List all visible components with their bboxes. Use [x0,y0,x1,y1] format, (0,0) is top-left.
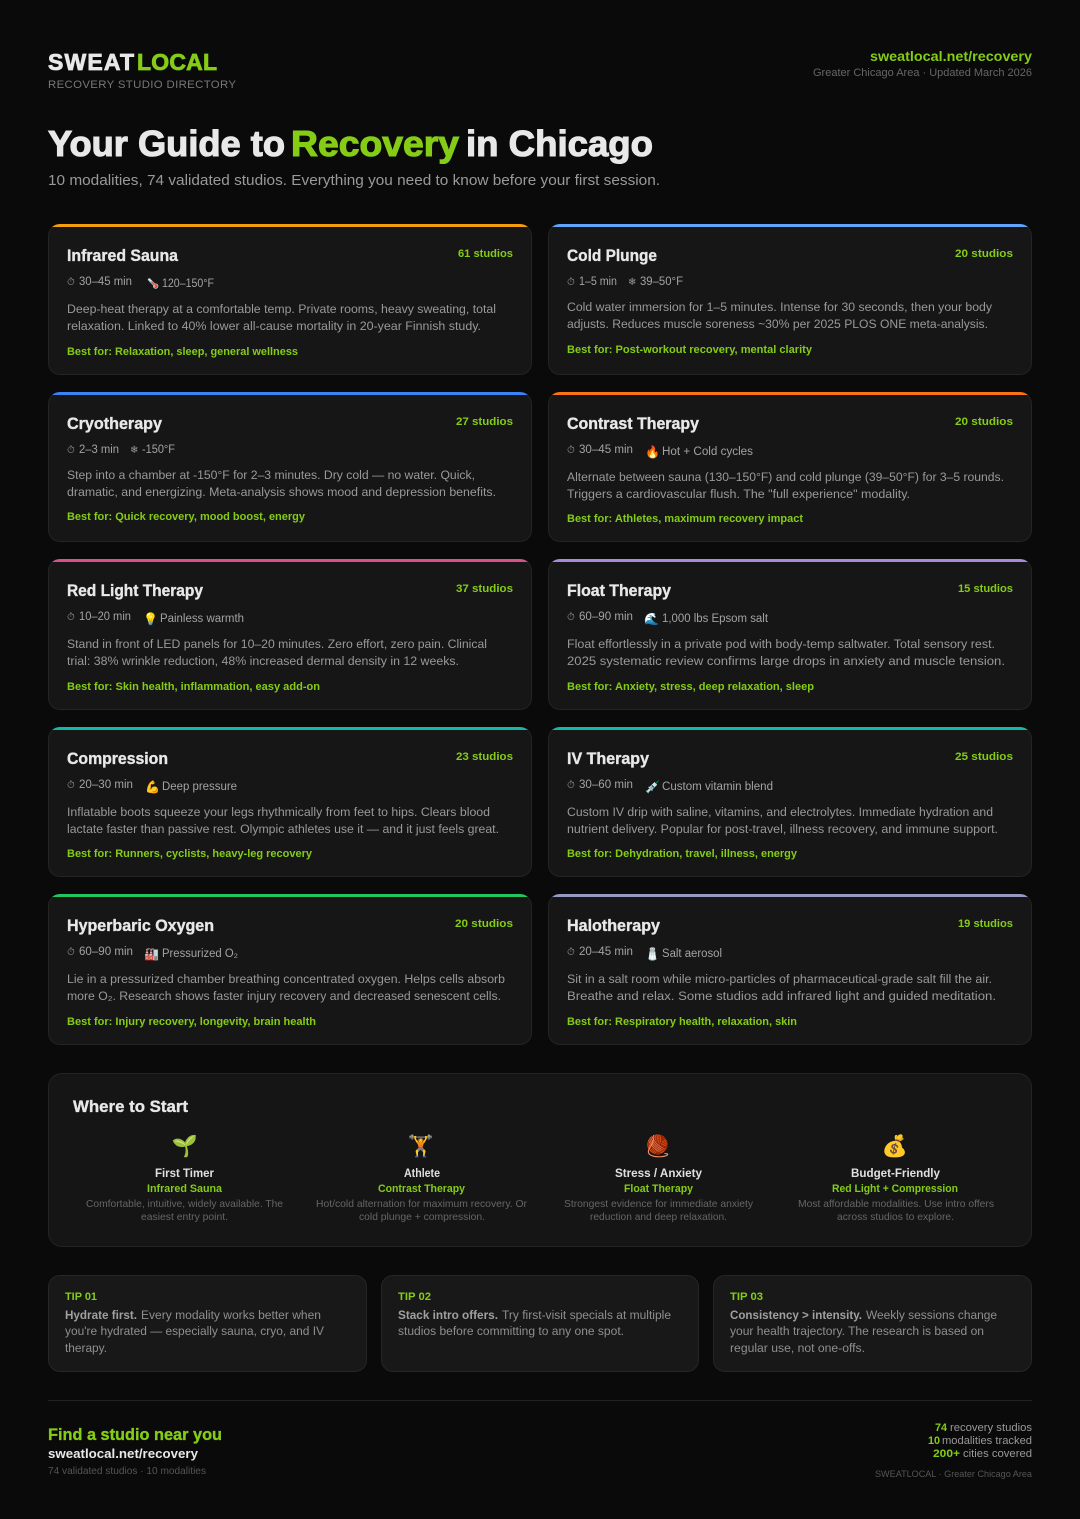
description [567,300,993,331]
card title: Halotherapy [567,917,660,935]
session meta: 💪 [145,780,160,794]
description [67,302,496,333]
studio count: 20 studios [455,918,513,930]
best for: Best for: Anxiety, stress, deep relaxation, sleep [567,681,814,693]
column: Athlete: Contrast Therapy [378,1183,466,1195]
footer: call to action: Find a studio near you [48,1425,222,1444]
header: brand logo: SWEAT [48,49,134,75]
session meta: 39–50°F [640,276,683,288]
best for: Best for: Respiratory health, relaxation, skin [567,1016,797,1028]
header: brand logo: LOCAL [137,49,217,75]
session meta [567,946,722,961]
tip card 02: TIP 02 [398,1291,431,1303]
column: Budget-Friendly [798,1133,994,1223]
footer: call to action [48,1425,222,1477]
description [67,972,505,1003]
column: First Timer: 🌱 [172,1134,198,1159]
session meta: Pressurized O₂ [162,948,238,960]
description: Triggers a cardiovascular flush. The "full experience" modality. [567,487,910,501]
session meta: 🌡️ [143,273,163,294]
session meta: Custom vitamin blend [662,781,773,793]
column: Athlete: Hot/cold alternation for maximum recovery. Or [316,1199,528,1210]
best for: Best for: Quick recovery, mood boost, energy [67,511,306,523]
session meta: 1–5 min [579,276,617,288]
studio count: 27 studios [456,416,513,428]
description [567,470,1004,501]
footer: stats: recovery studios [950,1422,1032,1434]
description: Inflatable boots squeeze your legs rhythmically from feet to hips. Clears blood [67,805,490,819]
session meta: Salt aerosol [662,948,722,960]
description: relaxation. Linked to 40% lower all-cause mortality in 20-year Finnish study. [67,319,481,333]
description: 2025 systematic review confirms large drops in anxiety and muscle tension. [567,654,1005,668]
column: Athlete: Athlete [404,1166,440,1180]
column: Athlete [316,1133,528,1223]
footer: call to action: 74 validated studios · 10 modalities [48,1466,206,1477]
session meta [567,444,753,459]
tip card 03: regular use, not one-offs. [730,1341,865,1355]
card title: Hyperbaric Oxygen [67,917,214,935]
description: Cold water immersion for 1–5 minutes. Intense for 30 seconds, then your body [567,300,993,314]
footer: stats [875,1422,1033,1479]
tip card 02: Stack intro offers. [398,1308,498,1322]
session meta: ⏱ [67,947,75,958]
panel: Float Therapy [548,559,1032,710]
column: Budget-Friendly: across studios to explore. [837,1212,954,1223]
session meta: 2–3 min [79,444,119,456]
session meta: ⏱ [567,612,575,623]
session meta: 💉 [645,780,660,794]
session meta: ⏱ [67,780,75,791]
tip card 03: Consistency > intensity. [730,1308,862,1322]
panel: Halotherapy [548,894,1032,1044]
card title: Infrared Sauna [67,247,179,265]
tip card 03 [714,1276,1032,1372]
tip card 03: your health trajectory. The research is based on [730,1324,984,1338]
session meta [67,444,175,456]
subtitle: 10 modalities, 74 validated studios. Everything you need to know before your first session. [48,173,660,189]
best for: Best for: Runners, cyclists, heavy-leg recovery [67,848,313,860]
description: Float effortlessly in a private pod with body-temp saltwater. Total sensory rest. [567,637,995,651]
session meta: 20–45 min [579,946,633,958]
session meta: 20–30 min [79,779,133,791]
header: brand logo: RECOVERY STUDIO DIRECTORY [48,79,236,91]
description: Stand in front of LED panels for 10–20 minutes. Zero effort, zero pain. Clinical [67,637,487,651]
title: in Chicago [466,123,653,164]
studio count: 20 studios [955,416,1013,428]
column: Stress / Anxiety: reduction and deep relaxation. [590,1212,727,1223]
best for: Best for: Injury recovery, longevity, brain health [67,1016,316,1028]
card title: IV Therapy [567,750,649,768]
best for: Best for: Dehydration, travel, illness, energy [567,848,798,860]
description [67,637,487,668]
card title: Red Light Therapy [67,582,203,600]
description: Step into a chamber at -150°F for 2–3 minutes. Dry cold — no water. Quick, [67,468,475,482]
studio count: 25 studios [955,751,1013,763]
session meta: 🔥 [645,445,660,459]
column: Stress / Anxiety: 🧶 [645,1133,671,1159]
session meta: ❄ [628,277,636,288]
session meta: ⏱ [567,947,575,958]
footer: call to action: sweatlocal.net/recovery [48,1446,199,1461]
description [67,468,496,499]
best for: Best for: Athletes, maximum recovery impact [567,513,803,525]
card title: Cryotherapy [67,415,162,433]
panel: Hyperbaric Oxygen [48,894,532,1044]
session meta: ⏱ [567,780,575,791]
panel: Cold Plunge [548,224,1032,374]
column: Budget-Friendly: Red Light + Compression [832,1183,958,1195]
best for: Best for: Skin health, inflammation, easy add-on [67,681,320,693]
panel: Contrast Therapy [548,392,1032,542]
column: First Timer: Infrared Sauna [147,1183,223,1195]
footer: stats: modalities tracked [942,1435,1032,1447]
session meta: Hot + Cold cycles [662,446,753,458]
column: First Timer: Comfortable, intuitive, widely available. The [86,1199,283,1210]
session meta: ❄ [130,445,138,456]
column: Athlete: cold plunge + compression. [359,1212,485,1223]
session meta: 60–90 min [579,611,633,623]
session meta: Painless warmth [160,613,244,625]
session meta: ⏱ [567,445,575,456]
column: Budget-Friendly: 💰 [882,1133,908,1159]
section heading: Where to Start [73,1097,188,1116]
session meta [67,946,238,961]
tip card 01: Every modality works better when [141,1308,321,1322]
description: Custom IV drip with saline, vitamins, and electrolytes. Immediate hydration and [567,805,993,819]
session meta [567,779,773,794]
column: Stress / Anxiety: Strongest evidence for immediate anxiety [564,1199,754,1210]
studio count: 15 studios [958,583,1013,595]
session meta: 30–45 min [79,276,132,288]
panel: Red Light Therapy [48,559,532,710]
session meta [567,276,683,288]
footer: stats: 200+ [933,1448,960,1460]
session meta: ⏱ [67,612,75,623]
description [67,805,499,836]
card title: Float Therapy [567,582,671,600]
session meta: 1,000 lbs Epsom salt [662,613,769,625]
header: brand logo [48,49,236,91]
description: Breathe and relax. Some studios add infrared light and guided meditation. [567,989,996,1003]
panel: IV Therapy [548,727,1032,876]
tip card 01: you're hydrated — especially sauna, cryo, and IV [65,1324,325,1338]
session meta: 💡 [143,612,158,626]
header: site link and update note: Greater Chicago Area · Updated March 2026 [813,67,1032,79]
column: Stress / Anxiety [564,1133,754,1223]
session meta: 30–60 min [579,779,633,791]
panel: Where to Start [48,1074,1032,1246]
description [567,805,998,836]
footer: stats: cities covered [963,1448,1032,1460]
tip card 02 [382,1276,698,1372]
tip card 01: therapy. [65,1341,107,1355]
footer: stats: 10 [928,1435,940,1447]
column: Athlete: 🏋️ [408,1133,434,1159]
session meta: 🌊 [644,612,659,626]
session meta: -150°F [142,444,175,456]
description: nutrient delivery. Popular for post-travel, illness recovery, and immune support. [567,822,998,836]
studio count: 61 studios [458,248,513,260]
session meta: 60–90 min [79,946,133,958]
panel: Infrared Sauna [48,224,532,374]
description [567,972,996,1003]
footer: stats: SWEATLOCAL · Greater Chicago Area [875,1469,1033,1479]
best for: Best for: Relaxation, sleep, general wellness [67,346,298,358]
tip card 03: Weekly sessions change [866,1308,997,1322]
card title: Contrast Therapy [567,415,699,433]
footer: stats: 74 [935,1422,948,1434]
column: First Timer: easiest entry point. [141,1212,228,1223]
card title: Cold Plunge [567,247,657,265]
session meta: ⏱ [67,445,75,456]
panel: Cryotherapy [48,392,532,542]
session meta: 30–45 min [579,444,633,456]
description: trial: 38% wrinkle reduction, 48% increased dermal density in 12 weeks. [67,654,459,668]
studio count: 20 studios [955,248,1013,260]
session meta: ⏱ [67,277,75,288]
column: First Timer: First Timer [155,1166,214,1180]
tip card 03: TIP 03 [730,1291,763,1303]
studio count: 37 studios [456,583,513,595]
session meta: 🏭 [144,947,159,961]
column: Stress / Anxiety: Float Therapy [624,1183,694,1195]
best for: Best for: Post-workout recovery, mental clarity [567,344,813,356]
session meta [67,611,244,626]
session meta [67,779,237,794]
column: Stress / Anxiety: Stress / Anxiety [615,1166,702,1180]
session meta: 🧂 [645,946,660,961]
session meta: 120–150°F [162,278,214,290]
tip card 02: studios before committing to any one spot. [398,1324,624,1338]
session meta: Deep pressure [162,781,237,793]
studio count: 19 studios [958,918,1013,930]
description: dramatic, and energizing. Meta-analysis shows mood and depression benefits. [67,485,496,499]
session meta: 10–20 min [79,611,131,623]
header: site link and update note [813,48,1032,79]
description: Sit in a salt room while micro-particles of pharmaceutical-grade salt fill the air. [567,972,992,986]
description: Deep-heat therapy at a comfortable temp. Private rooms, heavy sweating, total [67,302,496,316]
studio count: 23 studios [456,751,513,763]
column: Budget-Friendly: Most affordable modalities. Use intro offers [798,1199,994,1210]
title: Your Guide to [48,123,285,164]
tip card 01: Hydrate first. [65,1308,137,1322]
column: Budget-Friendly: Budget-Friendly [851,1166,940,1180]
column: First Timer [86,1134,283,1223]
card title: Compression [67,750,168,768]
session meta [67,273,214,294]
panel: Compression [48,727,532,876]
description: more O₂. Research shows faster injury recovery and decreased senescent cells. [67,989,501,1003]
header: site link and update note: sweatlocal.net/recovery [870,48,1032,64]
description [567,637,1005,668]
tip card 01: TIP 01 [65,1291,97,1303]
description: Alternate between sauna (130–150°F) and cold plunge (39–50°F) for 3–5 rounds. [567,470,1004,484]
description: adjusts. Reduces muscle soreness ~30% per 2025 PLOS ONE meta-analysis. [567,317,988,331]
title: Recovery [291,123,459,164]
session meta [567,611,769,626]
session meta: ⏱ [567,277,575,288]
description: Lie in a pressurized chamber breathing concentrated oxygen. Helps cells absorb [67,972,505,986]
tip card 01 [48,1276,366,1372]
description: lactate faster than passive rest. Olympic athletes use it — and it just feels great. [67,822,499,836]
title [48,123,653,164]
tip card 02: Try first-visit specials at multiple [502,1308,671,1322]
